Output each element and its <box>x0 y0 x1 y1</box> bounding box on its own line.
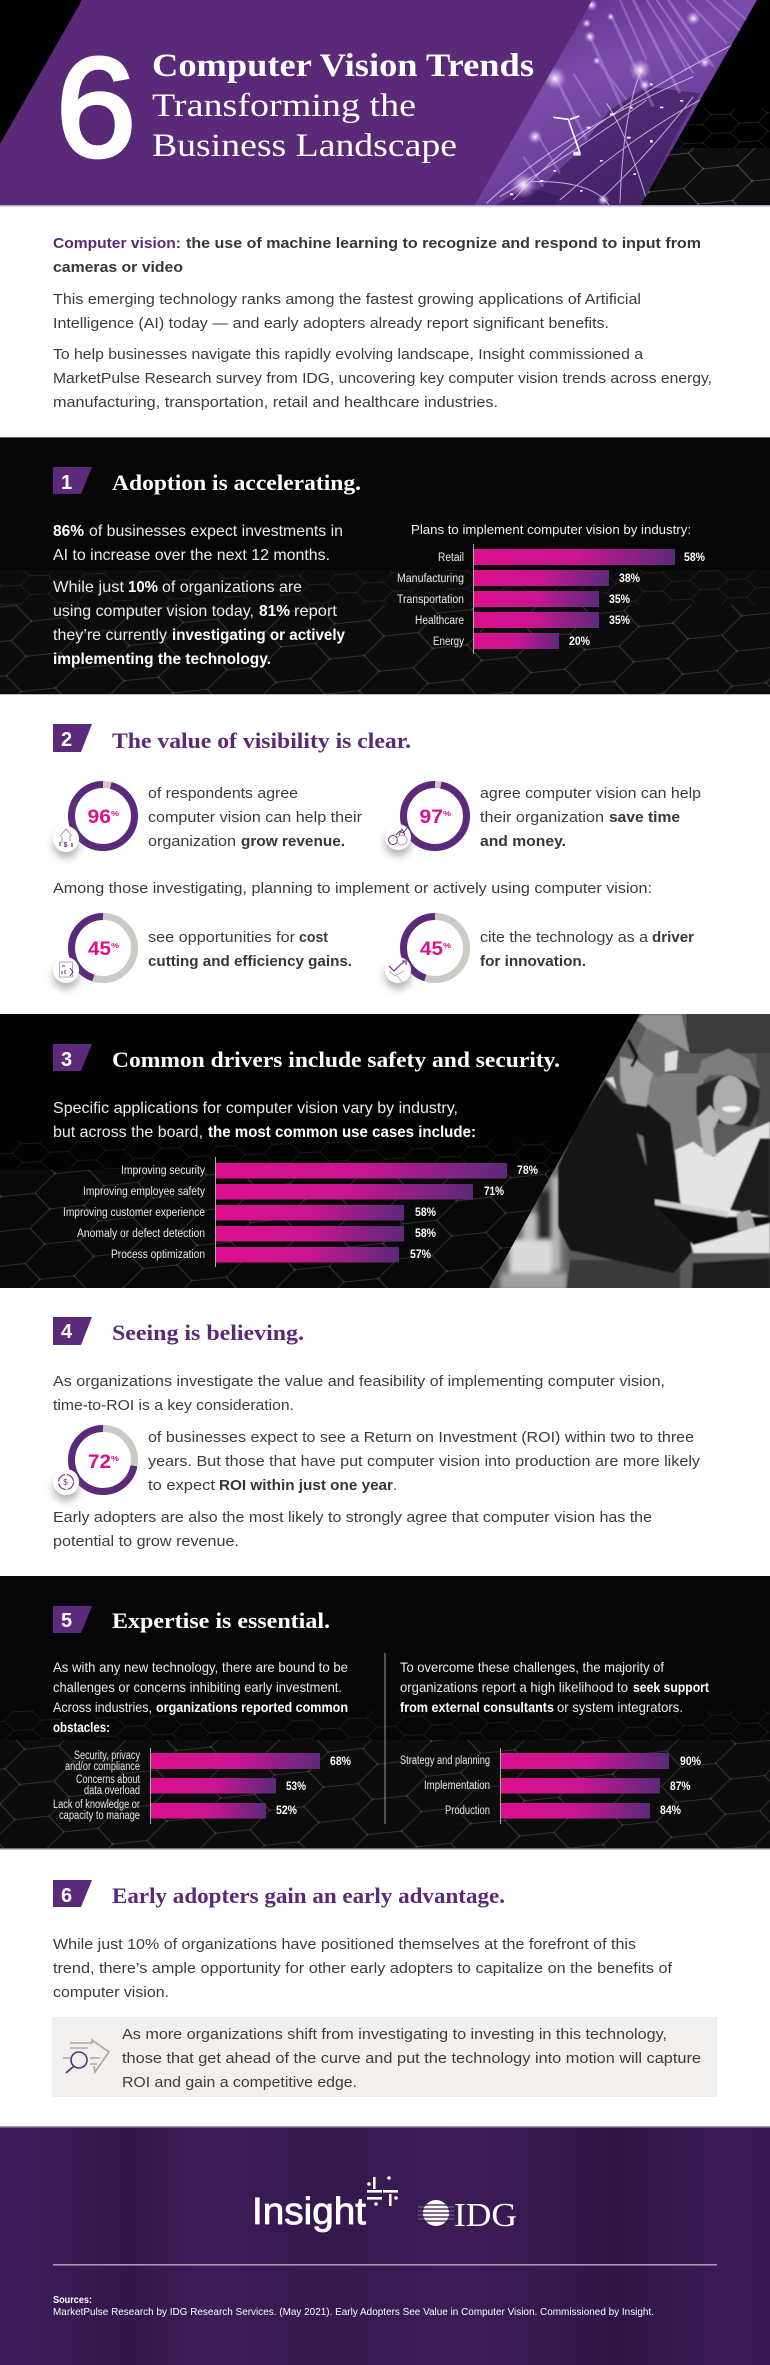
stat: 72 percent: % <box>111 1454 119 1463</box>
intro text block: Intelligence (AI) today — and early adopters already report significant benefits. <box>53 315 609 332</box>
bar chart: external support: 87% <box>670 1781 690 1793</box>
support text: seek support <box>633 1679 709 1695</box>
adoption text <box>53 523 345 668</box>
obstacles text: challenges or concerns inhibiting early investment. <box>53 1679 342 1695</box>
stat: 45 percent innovation: driver <box>652 929 694 946</box>
adoption text: using computer vision today, <box>53 603 254 620</box>
adoption text: While just <box>53 579 125 596</box>
panel: section 1 adoption <box>0 437 770 694</box>
logo: Insight: Insight <box>252 2191 366 2233</box>
badge 3: 3 <box>61 1049 72 1071</box>
panel: section 4 seeing is believing <box>53 1317 701 1550</box>
bar chart: plans by industry <box>397 523 705 654</box>
badge 1 <box>53 467 92 494</box>
drivers text <box>53 1100 476 1141</box>
bar chart: obstacles: data overload <box>84 1785 140 1797</box>
heading 3: Common drivers include safety and security. <box>112 1047 560 1072</box>
early adopters text: While just 10% of organizations have positioned themselves at the forefront of this <box>53 1936 636 1953</box>
intro text block: the use of machine learning to recognize and respond to input from <box>186 235 701 252</box>
stat: 72 percent: ROI within just one year <box>219 1477 393 1494</box>
obstacles text: organizations reported common <box>156 1699 348 1715</box>
stat: 96 percent: organization <box>148 833 236 850</box>
heading 2: The value of visibility is clear. <box>112 728 411 753</box>
stat: 72 percent: years. But those that have put computer vision into production are more likely <box>148 1453 701 1470</box>
early adopters text: computer vision. <box>53 1984 169 2001</box>
bar chart: plans by industry: Manufacturing <box>397 573 464 585</box>
stat: 96 percent: 96 <box>88 807 111 828</box>
intro text block: To help businesses navigate this rapidly evolving landscape, Insight commissioned a <box>53 346 644 363</box>
icon: cost document <box>53 957 79 989</box>
bar chart: obstacles: capacity to manage <box>59 1810 140 1822</box>
stat: 45 percent cost cutting: cost <box>299 929 328 946</box>
badge 5: 5 <box>61 1610 72 1632</box>
stat: 45 percent innovation: for innovation. <box>480 953 586 970</box>
photo: workers in hard hats <box>480 1010 770 1290</box>
badge 4 <box>53 1317 92 1345</box>
stat: 72 percent: of businesses expect to see a Return on Investment (ROI) within two to three <box>148 1429 694 1446</box>
bar chart: obstacles: Security, privacy <box>74 1750 140 1762</box>
adoption text: investigating or actively <box>172 627 345 644</box>
bar chart: obstacles <box>53 1748 351 1824</box>
stat: 72 percent: to expect <box>148 1477 216 1494</box>
stat: 96 percent: of respondents agree <box>148 785 298 802</box>
bar chart: use cases: 78% <box>517 1165 538 1177</box>
stat: 45 percent cost cutting: 45 <box>88 939 111 960</box>
stat: 45 percent cost cutting: % <box>111 941 119 950</box>
intro text block: This emerging technology ranks among the fastest growing applications of Artificial <box>53 291 641 308</box>
header image: purple data network <box>470 0 760 207</box>
support text: To overcome these challenges, the majority of <box>400 1659 664 1675</box>
obstacles text <box>53 1659 348 1735</box>
bar chart: obstacles: 53% <box>286 1781 306 1793</box>
title: Business Landscape <box>152 128 457 164</box>
bar chart: external support: Production <box>445 1805 490 1817</box>
bar chart: use cases: 71% <box>484 1186 504 1198</box>
intro text 4: As organizations investigate the value and feasibility of implementing computer vision, <box>53 1373 665 1390</box>
page header banner <box>0 0 770 207</box>
stat: 72 percent: . <box>393 1477 397 1494</box>
logo: IDG <box>418 2197 517 2234</box>
stat: 96 percent: computer vision can help their <box>148 809 362 826</box>
bar chart: use cases: Anomaly or defect detection <box>77 1228 205 1240</box>
icon: revenue arrow <box>53 826 79 858</box>
closing text 4 <box>53 1509 652 1550</box>
icon: revenue arrow: $ <box>64 842 68 849</box>
adoption text: report <box>294 603 338 620</box>
bar chart: plans by industry: 35% <box>609 615 630 627</box>
title: Transforming the <box>152 88 416 124</box>
stat: 96 percent: grow revenue. <box>241 833 345 850</box>
badge 4: 4 <box>61 1321 73 1343</box>
stat: 97 percent: % <box>443 809 451 818</box>
bar chart: use cases: Improving security <box>121 1165 205 1177</box>
intro text block: manufacturing, transportation, retail and healthcare industries. <box>53 394 498 411</box>
badge 6: 6 <box>61 1885 72 1907</box>
big numeral 6: 6 <box>56 28 136 186</box>
bar chart: external support: Implementation <box>424 1780 490 1792</box>
stat: 72 percent <box>53 1428 701 1501</box>
adoption text: of organizations are <box>162 579 302 596</box>
support text: organizations report a high likelihood to <box>400 1679 628 1695</box>
support text: or system integrators. <box>557 1699 683 1715</box>
callout: those that get ahead of the curve and put the technology into motion will capture <box>122 2050 701 2067</box>
stat: 45 percent innovation: cite the technology as a <box>480 929 649 946</box>
logo: IDG: IDG <box>454 2197 517 2234</box>
adoption text: 86% <box>53 523 84 540</box>
bar chart: plans by industry: 38% <box>619 573 640 585</box>
stat: 72 percent: 72 <box>88 1452 111 1473</box>
icon: dollar cycle: $ <box>63 1478 68 1487</box>
intro text block: cameras or video <box>53 259 183 276</box>
obstacles text: obstacles: <box>53 1719 110 1735</box>
drivers text: Specific applications for computer vision vary by industry, <box>53 1100 458 1117</box>
bar chart: plans by industry: Energy <box>433 636 464 648</box>
obstacles text: As with any new technology, there are bound to be <box>53 1659 348 1675</box>
bar chart: plans by industry: Plans to implement computer vision by industry: <box>411 523 691 537</box>
intro text block: Computer vision: <box>53 235 181 252</box>
badge 3 <box>53 1044 92 1071</box>
callout <box>52 2017 717 2097</box>
stat: 45 percent innovation <box>385 916 694 989</box>
sources <box>53 2294 654 2318</box>
badge 2: 2 <box>61 729 72 751</box>
bar chart: plans by industry: Retail <box>438 552 464 564</box>
stat: 97 percent: save time <box>609 809 680 826</box>
intro text block <box>53 235 712 411</box>
text: among those investigating: Among those investigating, planning to implement or actively using computer vision: <box>53 880 652 897</box>
panel: section 2 value of visibility <box>53 724 701 989</box>
bar chart: external support: 84% <box>660 1805 681 1817</box>
bar chart: plans by industry: 58% <box>684 552 705 564</box>
callout: ROI and gain a competitive edge. <box>122 2074 357 2091</box>
bar chart: obstacles: and/or compliance <box>65 1761 140 1773</box>
obstacles text: Across industries, <box>53 1699 152 1715</box>
bar chart: plans by industry: Healthcare <box>415 615 464 627</box>
adoption text: 81% <box>259 603 290 620</box>
intro text block: MarketPulse Research survey from IDG, uncovering key computer vision trends across energy, <box>53 370 712 387</box>
bar chart: plans by industry: 35% <box>609 594 630 606</box>
bar chart: use cases: Improving employee safety <box>83 1186 205 1198</box>
badge 1: 1 <box>61 472 72 494</box>
heading 1: Adoption is accelerating. <box>112 470 361 495</box>
logo: Insight <box>252 2176 398 2233</box>
sources: Sources: <box>53 2294 92 2306</box>
title <box>152 48 534 164</box>
closing text 4: Early adopters are also the most likely to strongly agree that computer vision has the <box>53 1509 652 1526</box>
bar chart: plans by industry: 20% <box>569 636 590 648</box>
panel: section 5 expertise <box>0 1576 770 1850</box>
icon: dollar cycle <box>53 1469 79 1501</box>
title: Computer Vision Trends <box>152 48 534 84</box>
stat: 97 percent: 97 <box>420 807 443 828</box>
stat: 45 percent cost cutting <box>53 916 352 989</box>
bar chart: obstacles: Lack of knowledge or <box>53 1799 140 1811</box>
bar chart: obstacles: 52% <box>276 1805 297 1817</box>
early adopters text: trend, there’s ample opportunity for other early adopters to capitalize on the benefits of <box>53 1960 673 1977</box>
adoption text: of businesses expect investments in <box>89 523 343 540</box>
adoption text: AI to increase over the next 12 months. <box>53 547 330 564</box>
icon: magnifier and arrow <box>63 2040 109 2073</box>
bar chart: external support: 90% <box>680 1756 701 1768</box>
bar chart: use cases: 58% <box>415 1228 436 1240</box>
bar chart: use cases: 57% <box>410 1249 431 1261</box>
bar chart: external support <box>400 1748 701 1824</box>
stat: 97 percent: and money. <box>480 833 566 850</box>
stat: 97 percent <box>385 784 701 856</box>
support text: from external consultants <box>400 1699 554 1715</box>
icon: money bag <box>385 824 411 856</box>
bar chart: obstacles: 68% <box>330 1756 351 1768</box>
stat: 96 percent: % <box>111 809 119 818</box>
stat: 45 percent innovation: 45 <box>420 939 443 960</box>
intro text 4 <box>53 1373 665 1414</box>
badge 6 <box>53 1880 92 1907</box>
bar chart: plans by industry: Transportation <box>397 594 464 606</box>
panel: section 3 drivers <box>0 1010 770 1290</box>
panel: section 6 early advantage <box>52 1880 717 2097</box>
adoption text: they’re currently <box>53 627 167 644</box>
bar chart: obstacles: Concerns about <box>76 1774 141 1786</box>
intro text 4: time-to-ROI is a key consideration. <box>53 1397 294 1414</box>
heading 4: Seeing is believing. <box>112 1320 304 1345</box>
bar chart: use cases: 58% <box>415 1207 436 1219</box>
adoption text: implementing the technology. <box>53 651 271 668</box>
early adopters text <box>53 1936 673 2001</box>
badge 5 <box>53 1606 92 1633</box>
drivers text: but across the board, <box>53 1124 203 1141</box>
bar chart: use cases: Improving customer experience <box>63 1207 205 1219</box>
drivers text: the most common use cases include: <box>208 1124 476 1141</box>
heading 5: Expertise is essential. <box>112 1608 330 1633</box>
closing text 4: potential to grow revenue. <box>53 1533 239 1550</box>
callout: As more organizations shift from investigating to investing in this technology, <box>122 2026 667 2043</box>
badge 2 <box>53 724 92 752</box>
stat: 97 percent: their organization <box>480 809 604 826</box>
stat: 45 percent cost cutting: see opportunities for <box>148 929 295 946</box>
heading 6: Early adopters gain an early advantage. <box>112 1883 505 1908</box>
adoption text: 10% <box>128 579 158 596</box>
bar chart: use cases <box>63 1157 538 1267</box>
stat: 97 percent: agree computer vision can help <box>480 785 701 802</box>
stat: 96 percent <box>53 784 362 858</box>
panel: footer <box>0 2126 770 2365</box>
stat: 45 percent cost cutting: cutting and efficiency gains. <box>148 953 352 970</box>
icon: innovation arrow <box>385 957 411 989</box>
support text <box>400 1659 709 1715</box>
bar chart: use cases: Process optimization <box>111 1249 205 1261</box>
bar chart: external support: Strategy and planning <box>400 1755 490 1767</box>
stat: 45 percent innovation: % <box>443 941 451 950</box>
sources: MarketPulse Research by IDG Research Services. (May 2021). Early Adopters See Value in Computer Vision. Commissioned by Insight. <box>53 2306 654 2318</box>
